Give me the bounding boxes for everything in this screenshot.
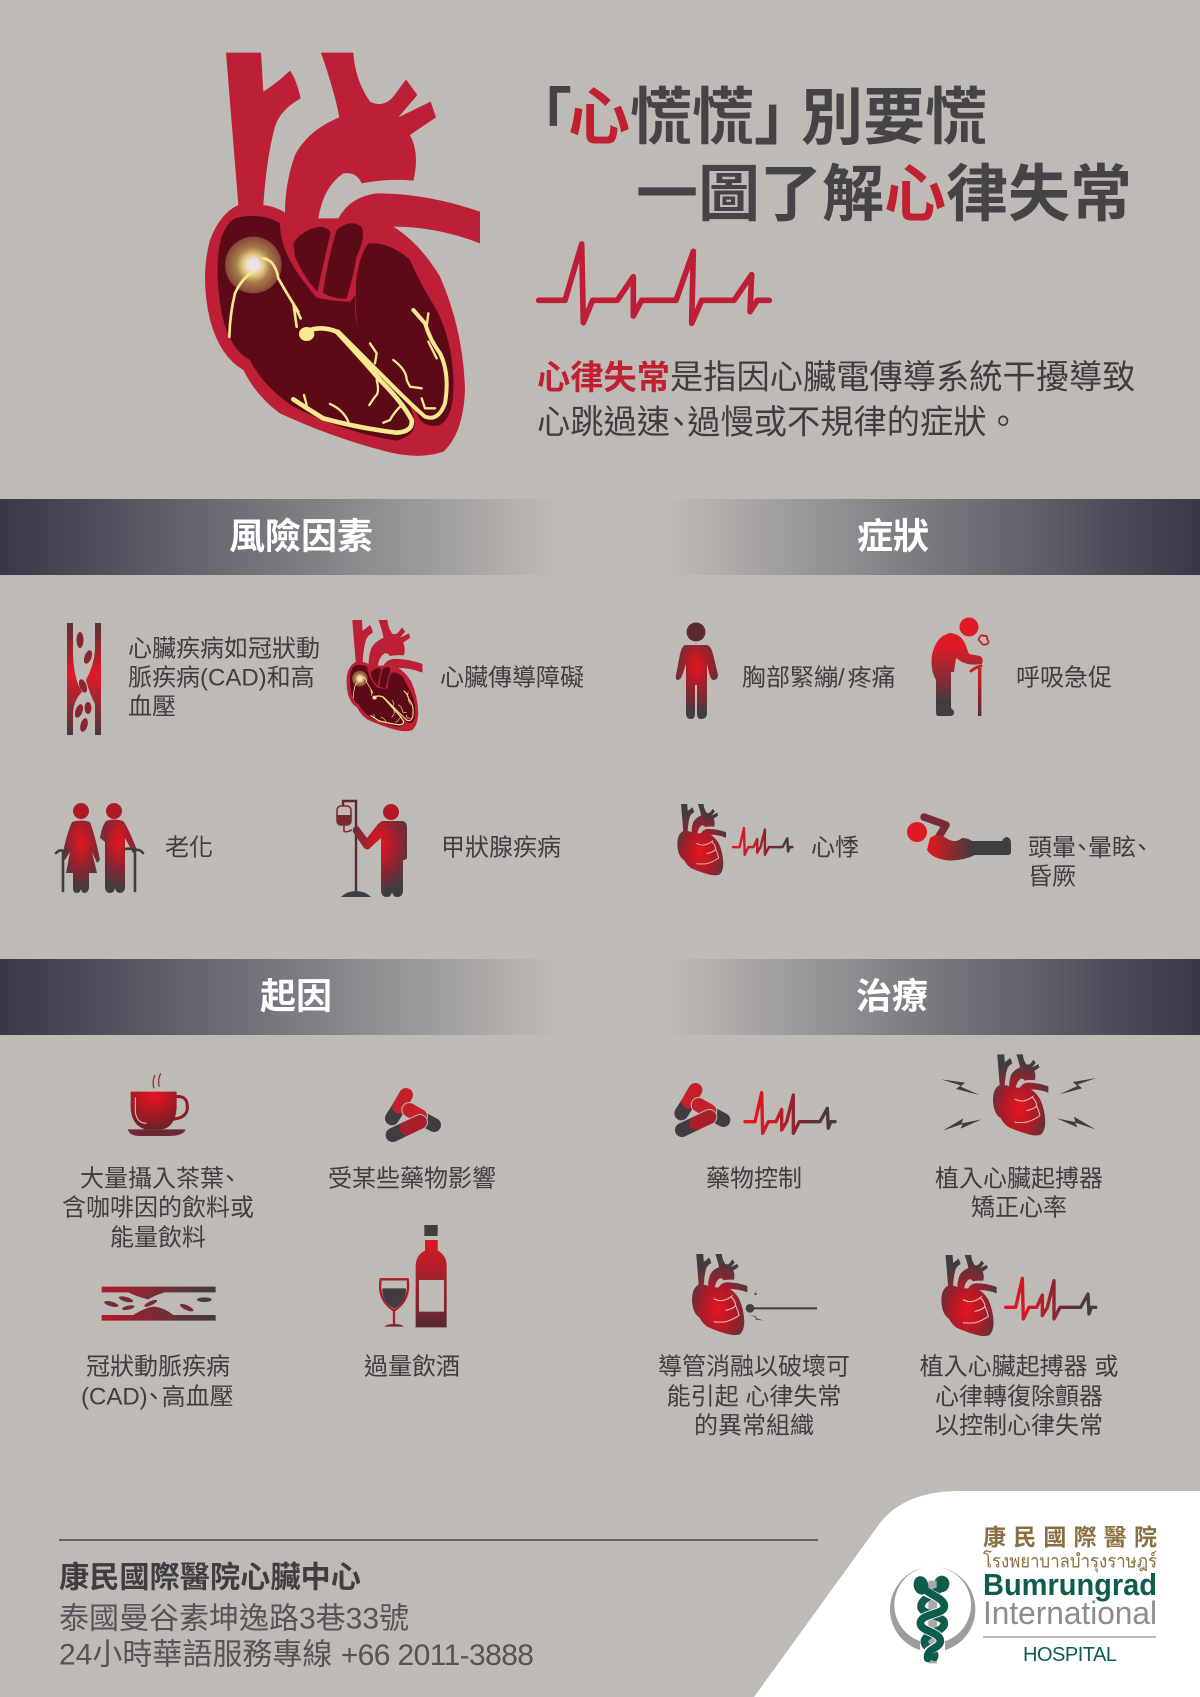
icon: heart conduction [346,620,422,731]
footer contact: 泰國曼谷素坤逸路3巷33號 [59,1602,409,1636]
text: CAD and hypertension: (CAD)、高血壓 [81,1384,234,1410]
text: excessive alcohol: 過量飲酒 [364,1354,460,1380]
text: dizziness and fainting [1028,834,1154,890]
text: dizziness and fainting: 昏厥 [1028,864,1076,890]
heading: risk factors [0,499,560,575]
logo emblem [890,1563,975,1663]
text: pacemaker or defibrillator: 以控制心律失常 [935,1412,1103,1440]
text: pacemaker or defibrillator [920,1354,1118,1440]
text: heart disease: 心臟疾病如冠狀動 [128,636,320,662]
text: caffeine: 大量攝入茶葉、 [80,1166,242,1192]
icon: heart with ECG implant [941,1255,1096,1336]
footer contact: 24小時華語服務專線 +66 2011-3888 [59,1638,533,1672]
text: catheter ablation: 導管消融以破壞可 [658,1354,850,1380]
intro paragraph: 心律失常是指因心臟電傳導系統干擾導致 [537,360,1136,396]
text: caffeine: 能量飲料 [110,1224,206,1252]
text: conduction disorder: 心臟傳導障礙 [440,664,584,692]
icon: narrowed artery [102,1287,216,1321]
text: medication effects: 受某些藥物影響 [328,1166,496,1192]
text: heart disease [128,636,320,720]
logo text: 康民國際醫院 [983,1524,1157,1550]
logo text: Bumrungrad [983,1567,1157,1602]
logo text [983,1524,1157,1666]
icon: pills and ECG [681,1090,835,1133]
text: CAD and hypertension: 冠狀動脈疾病 [86,1354,230,1380]
logo panel [754,1491,1200,1697]
heading: symptoms: 症狀 [857,516,929,556]
heading: causes [0,959,560,1035]
title [510,84,1132,230]
text: chest tightness: 胸部緊繃/疼痛 [742,664,896,692]
text: shortness of breath: 呼吸急促 [1016,664,1112,692]
panel: causes [0,959,560,1410]
icon: wine bottle and glass [380,1225,447,1327]
icon: pills [392,1095,434,1135]
icon: title ECG line [539,244,769,323]
icon: fainted figure [907,817,1011,860]
intro paragraph [537,360,1136,442]
text: catheter ablation: 的異常組織 [694,1412,814,1440]
text: pacemaker or defibrillator: 心律轉復除顫器 [935,1384,1103,1410]
icon: IV drip patient [337,801,407,897]
text: medication control: 藥物控制 [706,1166,802,1192]
icon: catheter ablation [692,1254,817,1335]
text: caffeine [62,1166,254,1252]
icon: heart with ECG [677,804,792,875]
text: thyroid disease: 甲狀腺疾病 [441,834,561,862]
icon: elderly couple [56,803,143,893]
heading: treatment [665,959,1200,1035]
text: aging: 老化 [165,834,213,862]
footer contact: 康民國際醫院心臟中心 [59,1560,361,1594]
icon: chest pain figure [676,622,718,719]
heading: risk factors: 風險因素 [229,516,373,556]
panel: treatment [658,959,1200,1440]
text: catheter ablation [658,1354,850,1440]
text: pacemaker correction [935,1166,1103,1222]
text: catheter ablation: 能引起 心律失常 [667,1384,841,1410]
text: palpitations: 心悸 [811,834,859,862]
panel: risk factors [0,499,584,897]
heading: causes: 起因 [260,976,332,1016]
icon: artery [67,623,101,735]
footer contact [59,1540,818,1672]
intro paragraph: 心跳過速、過慢或不規律的症狀。 [537,404,1020,442]
text: pacemaker or defibrillator: 植入心臟起搏器 或 [920,1354,1118,1380]
logo text: HOSPITAL [1023,1644,1117,1666]
icon: heart with sparks [941,1054,1097,1135]
heading: treatment: 治療 [856,976,928,1016]
title: 一圖了解心律失常 [636,160,1132,230]
text: pacemaker correction: 矯正心率 [971,1194,1067,1222]
text: CAD and hypertension [81,1354,234,1410]
panel: symptoms [665,499,1200,890]
text: heart disease: 脈疾病(CAD)和高 [128,664,315,692]
text: heart disease: 血壓 [128,694,176,720]
text: pacemaker correction: 植入心臟起搏器 [935,1166,1103,1192]
icon: shortness of breath figure [932,618,988,716]
hero illustration: heart conduction system [205,53,480,456]
logo text: โรงพยาบาลบำรุงราษฎร์ [983,1550,1157,1574]
text: caffeine: 含咖啡因的飲料或 [62,1194,254,1222]
title: 「心慌慌」別要慌 [510,84,987,152]
heading: symptoms [665,499,1200,575]
icon: coffee cup [128,1073,187,1136]
text: dizziness and fainting: 頭暈、暈眩、 [1028,834,1154,862]
logo text: International [983,1595,1157,1631]
